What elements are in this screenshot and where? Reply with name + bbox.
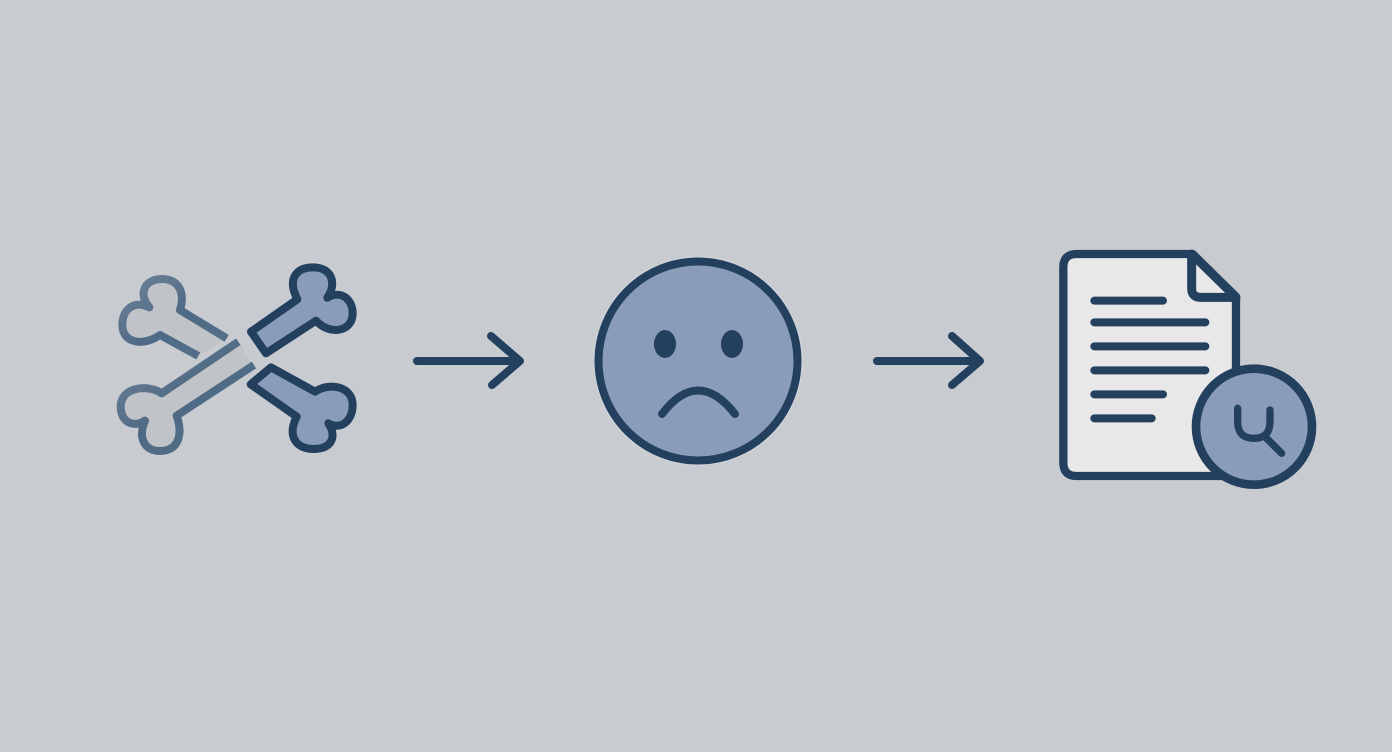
document page xyxy=(1063,254,1236,476)
bottom-left faded bone xyxy=(121,342,254,451)
text lines xyxy=(1094,301,1205,418)
icon: sad face xyxy=(598,262,798,460)
bottom-right blue bone xyxy=(251,367,353,449)
top-left faded bone fragment xyxy=(122,279,227,356)
frown xyxy=(662,390,735,414)
magnifier badge xyxy=(1196,369,1312,485)
arrow: bones to face xyxy=(417,336,520,385)
icon: broken crossed bones xyxy=(121,267,353,451)
top-right blue bone xyxy=(251,267,353,353)
icon: document with magnifier xyxy=(1063,254,1312,485)
arrow: face to report xyxy=(877,336,980,385)
right eye xyxy=(721,330,743,358)
folded corner xyxy=(1192,254,1236,297)
left eye xyxy=(654,330,676,358)
face circle xyxy=(598,262,798,460)
